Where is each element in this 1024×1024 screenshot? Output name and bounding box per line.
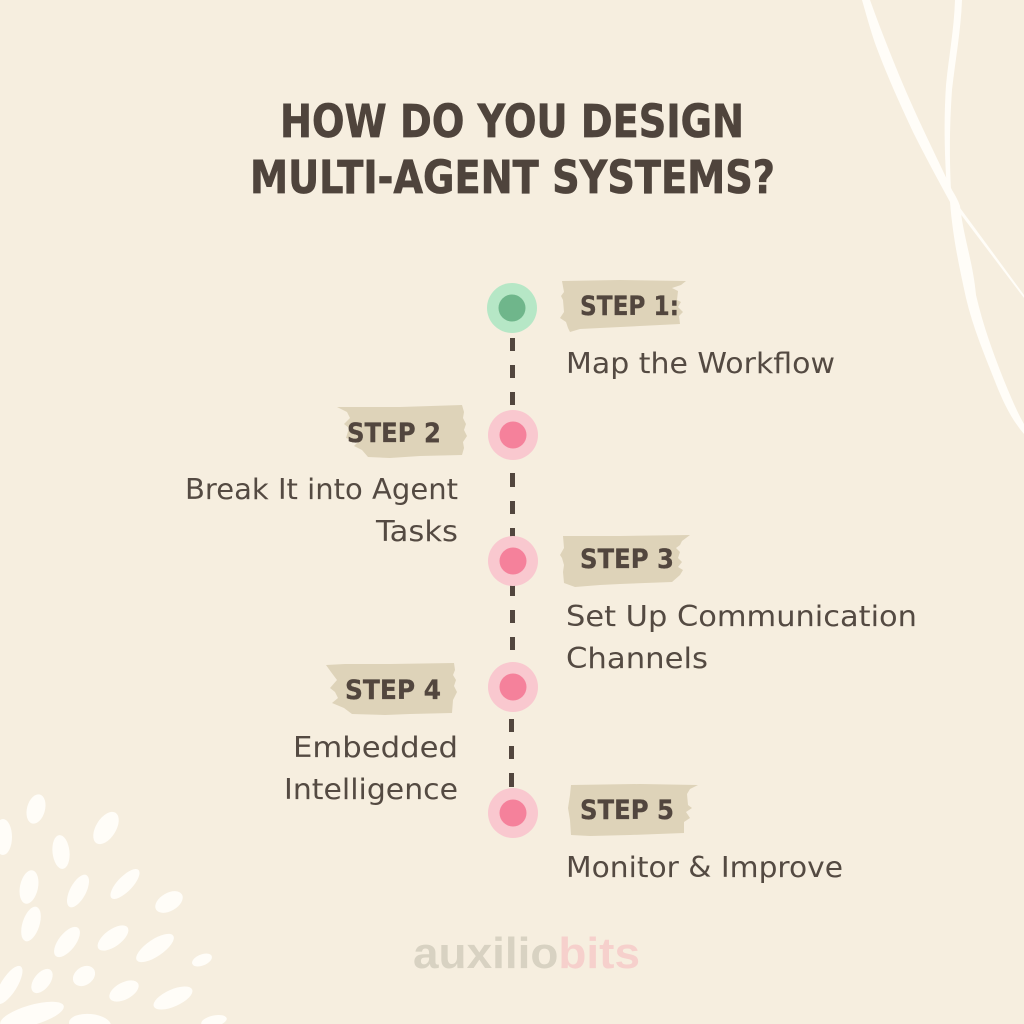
step 5 label xyxy=(568,784,698,836)
decoration: white brush dabs bottom left xyxy=(0,792,228,1024)
step 4 description xyxy=(284,731,458,806)
step 2 label: STEP 2 xyxy=(347,418,441,449)
step 4 label: STEP 4 xyxy=(345,675,441,706)
step 5 label: STEP 5 xyxy=(580,795,674,826)
step 2 description xyxy=(185,473,458,548)
step 2 description: Tasks xyxy=(375,515,458,548)
step 2 marker xyxy=(488,410,538,460)
step 5 marker xyxy=(488,788,538,838)
step 2 label xyxy=(337,405,467,458)
step 1 description: Map the Workflow xyxy=(566,347,835,380)
step 5 description: Monitor & Improve xyxy=(566,851,843,884)
step 4 description: Intelligence xyxy=(284,773,458,806)
step 1 marker xyxy=(487,283,537,333)
step 1 label: STEP 1: xyxy=(580,291,679,322)
step 4 label xyxy=(326,663,457,715)
step 3 label: STEP 3 xyxy=(580,544,674,575)
step 3 description: Channels xyxy=(566,642,708,675)
step 3 label xyxy=(560,535,690,587)
step 4 marker xyxy=(488,662,538,712)
step 1 label xyxy=(560,280,686,332)
decoration: white curved lines top right xyxy=(862,0,1024,434)
step 4 description: Embedded xyxy=(293,731,458,764)
title: HOW DO YOU DESIGN xyxy=(280,95,744,148)
step 3 description xyxy=(566,600,917,675)
title: MULTI-AGENT SYSTEMS? xyxy=(250,151,775,204)
step 2 description: Break It into Agent xyxy=(185,473,458,506)
title xyxy=(250,95,775,204)
dashed timeline connector xyxy=(509,338,515,787)
step 3 marker xyxy=(488,536,538,586)
step 3 description: Set Up Communication xyxy=(566,600,917,633)
logo: auxiliobits: auxiliobits xyxy=(413,929,640,978)
